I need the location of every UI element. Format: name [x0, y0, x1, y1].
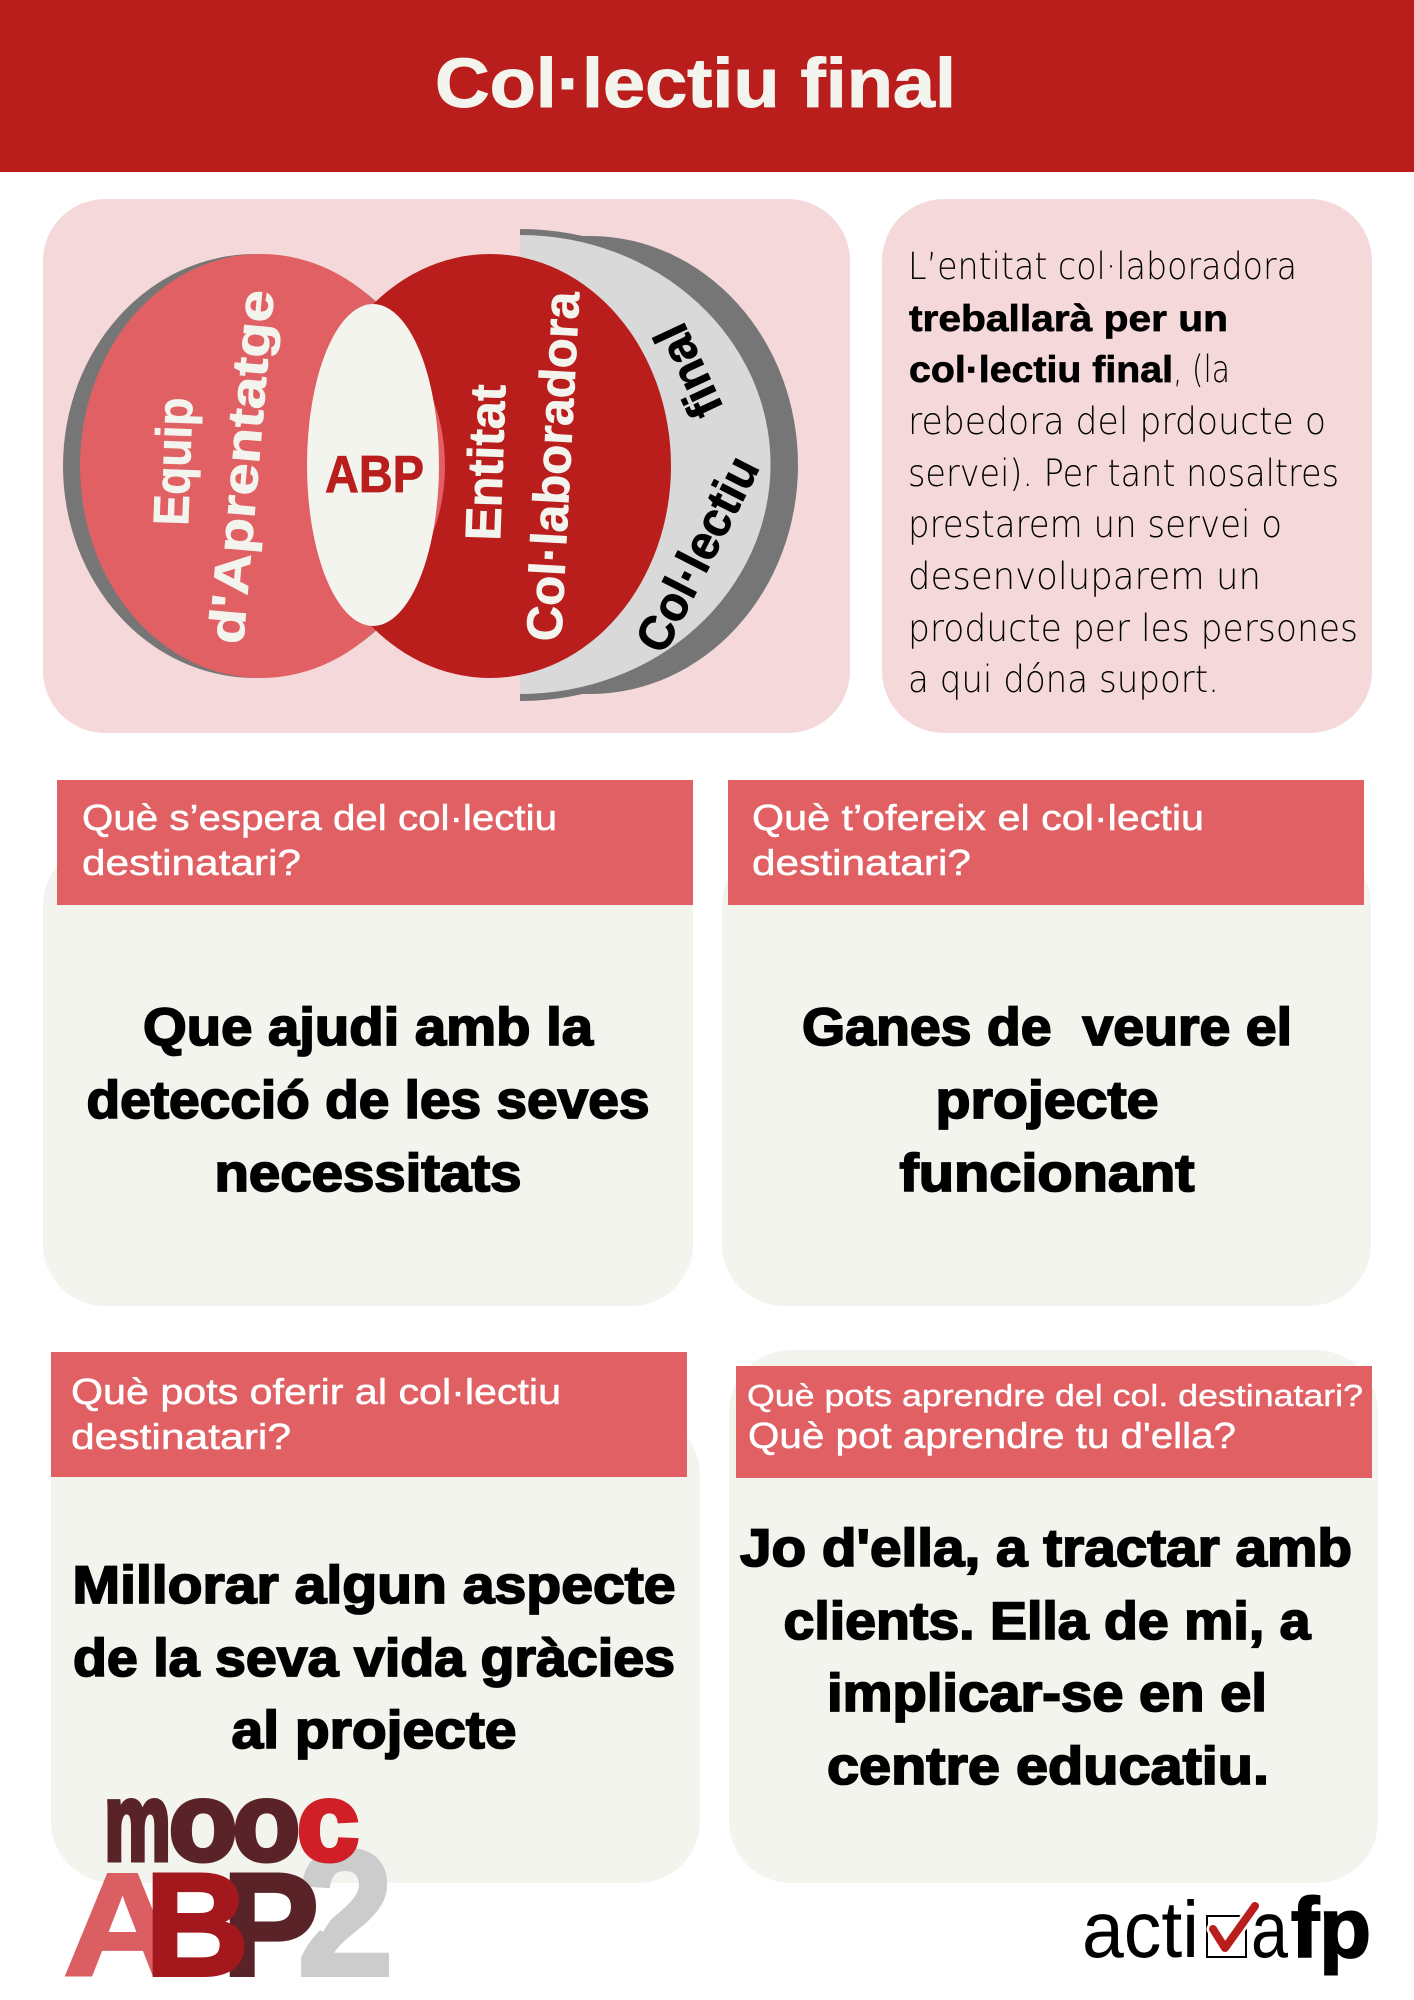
label: equip: Equip [143, 397, 203, 526]
panel: intro text: prestarem un servei o [908, 503, 1282, 546]
answer text: clients. Ella de mi, a [784, 1592, 1311, 1651]
panel: intro text [882, 199, 1372, 733]
answer text [86, 998, 650, 1203]
answer text: Ganes de veure el [802, 998, 1292, 1057]
answer text: projecte [936, 1071, 1158, 1130]
band heading [57, 780, 693, 905]
label: col·laboradora: Col·laboradora [516, 289, 590, 643]
band heading: destinatari? [71, 1416, 291, 1457]
band heading: Què t’ofereix el col·lectiu [752, 797, 1204, 838]
band heading: Què pot aprendre tu d'ella? [748, 1415, 1236, 1456]
logo: MOOC ABP 2: c [297, 1761, 359, 1884]
answer text [72, 1556, 676, 1760]
panel: intro text: a qui dóna suport. [908, 658, 1219, 701]
panel: intro text: col·lectiu final [909, 349, 1173, 390]
title: Col·lectiu final [435, 44, 956, 122]
answer text: implicar-se en el [827, 1664, 1267, 1723]
answer text: Millorar algun aspecte [72, 1556, 676, 1615]
label: entitat: Entitat [455, 383, 516, 541]
band heading [728, 780, 1364, 905]
lens: ABP: ABP [325, 446, 424, 504]
band heading: destinatari? [82, 842, 301, 883]
panel: intro text: rebedora del prdoucte o [908, 400, 1326, 443]
panel: què pots aprendre [729, 1350, 1378, 1883]
band heading [736, 1366, 1372, 1478]
circle: equip d'aprenentatge [80, 254, 442, 678]
panel: venn diagram [43, 199, 850, 733]
answer text: necessitats [214, 1144, 522, 1203]
answer text: Jo d'ella, a tractar amb [740, 1519, 1352, 1578]
panel: què pots oferir [51, 1352, 700, 1883]
logo: activafp: a [1251, 1885, 1288, 1974]
pink sliver at the lens edge [313, 351, 445, 581]
logo: activafp: acti [1082, 1885, 1199, 1974]
answer text: funcionant [900, 1144, 1194, 1203]
answer text: de la seva vida gràcies [73, 1629, 675, 1688]
panel: què s'espera [43, 780, 693, 1306]
panel: què t'ofereix [722, 780, 1371, 1306]
answer text: al projecte [232, 1701, 516, 1760]
answer text: detecció de les seves [86, 1071, 650, 1130]
header bar [0, 0, 1414, 172]
logo: activafp: fp [1291, 1881, 1371, 1975]
band heading: destinatari? [752, 842, 971, 883]
logo: MOOC ABP 2: m [104, 1761, 171, 1884]
label: final: final [644, 315, 734, 426]
logo: MOOC ABP 2: o [233, 1761, 300, 1884]
logo: activafp [1082, 1881, 1371, 1975]
band heading: Què pots aprendre del col. destinatari? [747, 1378, 1363, 1413]
answer text [740, 1519, 1352, 1796]
panel: intro text: producte per les persones [908, 607, 1358, 650]
lens: ABP [307, 304, 439, 626]
label: d'aprenentatge: d'Aprentatge [198, 287, 285, 646]
panel: intro text: L’entitat col·laboradora [908, 245, 1297, 288]
shadow of left circle [63, 254, 447, 678]
band heading: Què s’espera del col·lectiu [82, 797, 557, 838]
answer text: centre educatiu. [827, 1737, 1269, 1796]
logo: MOOC ABP 2 [63, 1761, 394, 2000]
band heading: Què pots oferir al col·lectiu [71, 1371, 561, 1412]
logo: MOOC ABP 2: o [169, 1761, 237, 1884]
panel: intro text: desenvoluparem un [908, 555, 1261, 598]
crescent: col·lectiu final [520, 229, 798, 701]
panel: intro text: treballarà per un [909, 298, 1228, 339]
band heading [51, 1352, 687, 1477]
answer text: Que ajudi amb la [143, 998, 594, 1057]
answer text [802, 998, 1292, 1203]
circle: entitat col·laboradora [309, 254, 671, 678]
label: col·lectiu: Col·lectiu [626, 448, 770, 661]
panel: intro text: , (la [1173, 348, 1230, 391]
panel: intro text: servei). Per tant nosaltres [908, 452, 1339, 495]
